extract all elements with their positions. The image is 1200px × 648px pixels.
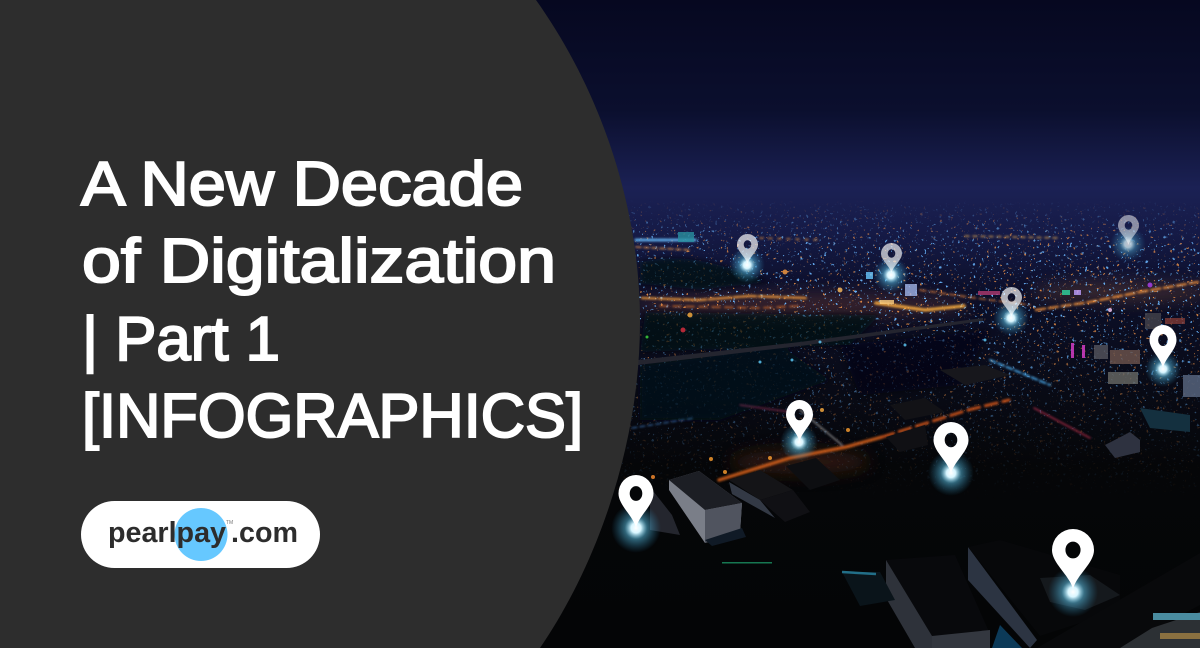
pin 3 — [993, 287, 1029, 336]
title: | Part 1 — [82, 305, 280, 374]
pin 2 — [873, 243, 909, 293]
lit building bottom right — [1120, 612, 1200, 648]
trademark: TM — [226, 520, 233, 526]
dark hill patches — [640, 258, 990, 420]
title — [81, 150, 583, 451]
logo domain: .com — [231, 517, 298, 549]
city light specks — [600, 200, 1200, 500]
night city photo background — [536, 0, 1200, 648]
elevated highway — [638, 318, 983, 365]
title: of Digitalization — [82, 227, 556, 296]
foreground dark ledge — [1037, 553, 1200, 648]
title: [INFOGRAPHICS] — [82, 382, 583, 451]
logo blue circle — [174, 508, 228, 561]
logo wordmark: pearlpay — [108, 517, 226, 549]
buildings: mid ground — [886, 365, 1190, 458]
illuminated streets — [632, 236, 1198, 480]
buildings: white apartment block — [650, 458, 840, 564]
pin 7 — [928, 422, 974, 496]
pin 6 — [780, 400, 818, 461]
colourful signs and hot lights — [646, 232, 1200, 479]
pin 4 — [1110, 215, 1146, 262]
pin 1 — [729, 234, 765, 283]
pin 5 — [1145, 325, 1181, 387]
map pins with glows — [611, 215, 1181, 617]
title: A New Decade — [81, 150, 523, 219]
logo pill — [81, 501, 320, 568]
haze over the distant city — [630, 283, 1200, 474]
pin 8 — [611, 475, 661, 553]
buildings: lower right block — [842, 540, 1120, 648]
dark curved left panel — [0, 0, 640, 648]
pin 9 — [1048, 529, 1098, 617]
